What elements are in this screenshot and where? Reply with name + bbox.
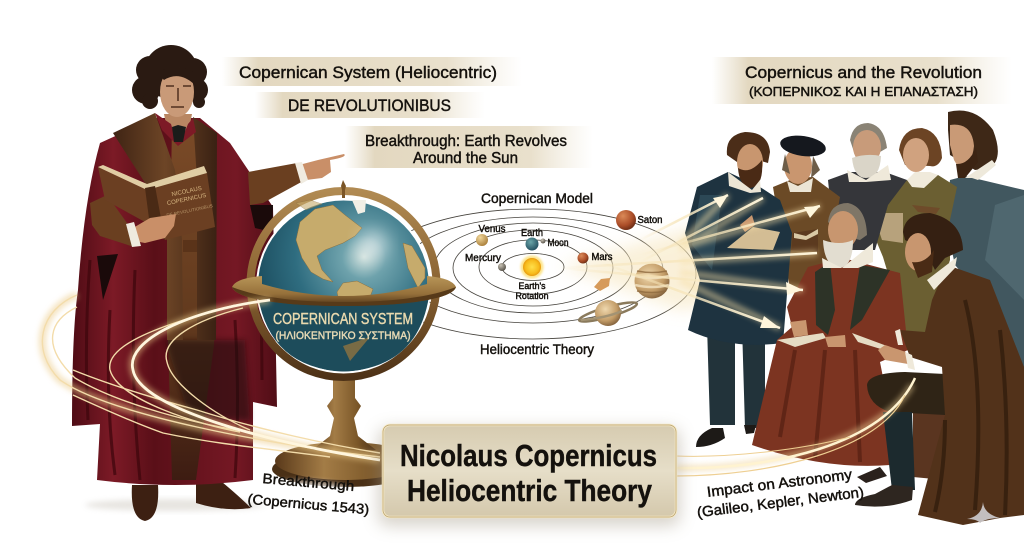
left sleeve (90, 195, 134, 247)
book: De Revolutionibus: COPERNICUS (167, 193, 207, 207)
finial (341, 180, 346, 198)
horizon ring (232, 276, 456, 306)
holding hand (133, 214, 176, 243)
planet labels: Mercury (465, 253, 501, 264)
astronomer: bearded man in dark blue (685, 132, 792, 447)
astronomer: seated man in brown coat (855, 213, 1024, 525)
planet labels: Earth's (518, 281, 546, 291)
heading: De Revolutionibus: DE REVOLUTIONIBUS (288, 96, 451, 115)
orbit rings (370, 209, 696, 339)
planet labels: Venus (478, 224, 506, 235)
globe lower hemisphere (258, 296, 429, 372)
heading: Copernican System (Heliocentric) (222, 57, 522, 86)
planet labels: Saton (638, 215, 662, 226)
heading: Copernicus and the Revolution: Copernicus and the Revolution (745, 63, 982, 82)
book: De Revolutionibus: DE REVOLUTIONIBUS (166, 203, 213, 218)
label: Heliocentric Theory: Heliocentric Theory (480, 341, 594, 357)
astronomer: young man in olive (873, 128, 957, 340)
title box: Nicolaus Copernicus Heliocentric Theory: Nicolaus Copernicus (400, 438, 657, 473)
sparkle mark (967, 502, 1000, 523)
planet: Saturn (578, 299, 638, 326)
globe label (273, 311, 413, 342)
arrows: light beams from model to astronomers (560, 195, 820, 328)
belt (183, 240, 197, 252)
globe label: (ΗΛΙΟΚΕΝΤΡΙΚΟ ΣΥΣΤΗΜΑ) (276, 330, 410, 342)
asteroid cluster (594, 278, 610, 291)
astronomer: white-bearded man in grey (828, 123, 907, 250)
stand base (272, 372, 418, 487)
meridian ring (250, 191, 436, 377)
planet labels: Mars (592, 252, 612, 263)
figure: Copernicus (72, 45, 345, 521)
planet: Moon (540, 238, 546, 244)
planet labels: Earth (521, 228, 543, 239)
heading: Breakthrough Earth Revolves Around the Sun: Breakthrough: Earth Revolves (365, 133, 567, 150)
dark lining (97, 205, 273, 300)
planet: Saton (616, 210, 636, 230)
cuff (295, 162, 308, 184)
pointing hand (299, 154, 345, 180)
right sleeve (248, 163, 305, 205)
label: Impact on Astronomy (Galileo, Kepler, Newton) (696, 467, 865, 521)
group: astronomers who followed (685, 110, 1024, 525)
label: Breakthrough (Copernicus 1543) (245, 470, 370, 517)
Greenland (352, 200, 366, 214)
heading: Copernicus and the Revolution: (ΚΟΠΕΡΝΙΚΟΣ ΚΑΙ Η ΕΠΑΝΑΣΤΑΣΗ) (749, 85, 978, 99)
planet labels: Rotation (516, 291, 548, 301)
heading: De Revolutionibus (255, 92, 485, 118)
swoosh: golden light trail right (676, 378, 915, 476)
label: Breakthrough (Copernicus 1543): (Copernicus 1543) (247, 491, 370, 517)
title box: Nicolaus Copernicus Heliocentric Theory: Heliocentric Theory (407, 473, 653, 508)
astronomer: standing man in blue at rear right (932, 110, 1024, 385)
white gap (256, 198, 431, 374)
globe label: COPERNICAN SYSTEM (273, 311, 413, 328)
heading: Breakthrough Earth Revolves Around the Sun: Around the Sun (413, 150, 518, 167)
head (132, 45, 208, 146)
shadow inside the light trail (165, 340, 250, 420)
floor shadow (85, 499, 265, 511)
label: Impact on Astronomy (Galileo, Kepler, Newton): (Galileo, Kepler, Newton) (696, 485, 865, 521)
book: De Revolutionibus: NICOLAUS (171, 186, 202, 198)
planet: Earth (526, 238, 538, 250)
astronomer: man with black cap (773, 133, 840, 290)
astronomer: seated bearded elder in red robe (752, 203, 908, 466)
beam glow from the model (560, 225, 740, 310)
fur collar (113, 113, 217, 340)
sphere (258, 200, 429, 372)
planet: Jupiter (634, 264, 670, 298)
swoosh: golden light trail left (42, 295, 380, 460)
continents (296, 200, 425, 297)
shoes (132, 482, 251, 521)
figure: globe on brass stand (232, 180, 456, 487)
planet: Venus (476, 234, 488, 246)
planet labels: Moon (548, 238, 568, 249)
heading: Copernicus and the Revolution (712, 57, 1012, 104)
planet labels (465, 215, 662, 301)
heading: Copernican System (Heliocentric): Copernican System (Heliocentric) (239, 63, 497, 82)
robe (72, 118, 277, 485)
left cuff (126, 222, 141, 247)
book: De Revolutionibus (98, 165, 215, 240)
label: Breakthrough (Copernicus 1543): Breakthrough (262, 470, 355, 494)
arrowheads (713, 195, 820, 328)
heading: Breakthrough Earth Revolves Around the Sun (345, 126, 593, 168)
chart: Copernican solar system model (370, 190, 740, 357)
tunic and lower fur panel (168, 125, 216, 480)
icon: sun (520, 256, 544, 278)
planet: Mars (578, 252, 588, 264)
label: Impact on Astronomy (Galileo, Kepler, Newton): Impact on Astronomy (706, 467, 854, 501)
robe folds (86, 240, 262, 480)
label: Copernican Model: Copernican Model (481, 190, 593, 206)
highlight (359, 231, 387, 259)
title box: Nicolaus Copernicus Heliocentric Theory (378, 425, 680, 526)
planet: Mercury (498, 263, 506, 271)
